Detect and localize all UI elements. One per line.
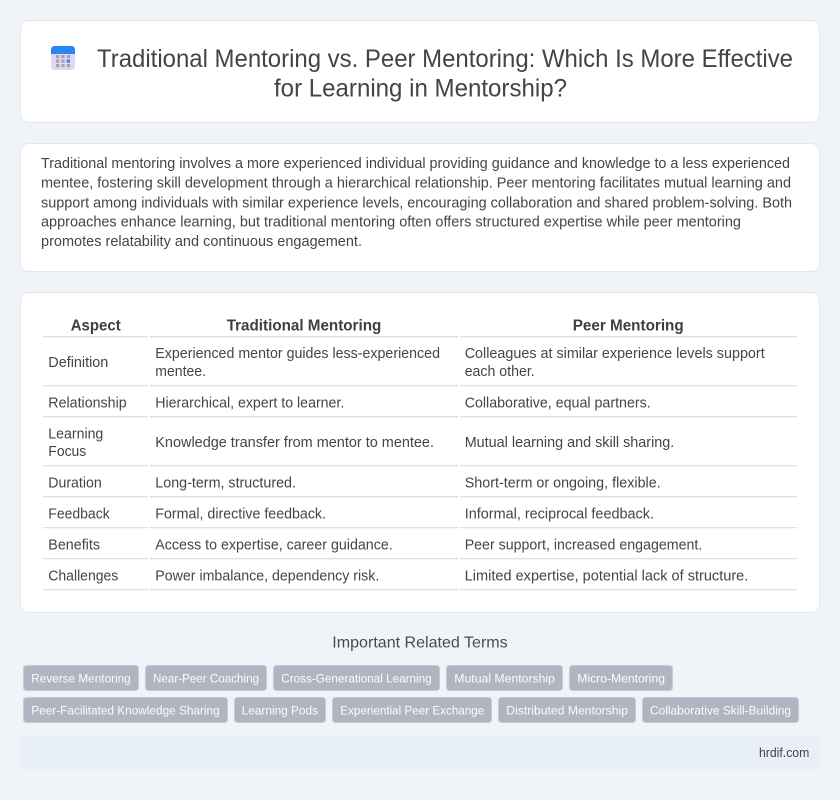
row: challenges: Challenges: [48, 568, 118, 584]
row: learning focus: Focus: [48, 444, 86, 460]
row: definition: Experienced mentor guides less-experienced: [155, 346, 440, 362]
row: duration: Duration: [48, 475, 102, 491]
row: challenges: Power imbalance, dependency risk.: [155, 568, 379, 584]
tag: Cross-Generational Learning: [281, 671, 432, 685]
text block: introduction: [41, 156, 792, 250]
text block: introduction: Traditional mentoring involves a more experienced individual providing guidance and knowledge to a less experienced: [41, 156, 790, 172]
row: benefits: Benefits: [48, 537, 100, 553]
tag: [498, 698, 636, 722]
row: definition: mentee.: [155, 364, 206, 380]
tag: Learning Pods: [242, 703, 318, 717]
footer: hrdif.com: [759, 746, 809, 760]
text block: introduction: promotes relatability and continuous engagement.: [41, 234, 362, 250]
footer: [20, 736, 820, 770]
row: relationship: Hierarchical, expert to learner.: [155, 395, 344, 411]
tag: [570, 666, 672, 690]
row: benefits: [48, 537, 702, 553]
tag: Near-Peer Coaching: [153, 671, 259, 685]
row: feedback: Feedback: [48, 506, 110, 522]
row: relationship: Relationship: [48, 395, 127, 411]
row: benefits: Access to expertise, career guidance.: [155, 537, 393, 553]
tag: [332, 698, 492, 722]
tag: [146, 666, 266, 690]
title: Traditional Mentoring vs. Peer Mentoring: Which Is More Effective: [97, 45, 793, 73]
tag: Experiential Peer Exchange: [340, 703, 484, 717]
table header: Aspect: [71, 318, 121, 334]
row: duration: Short-term or ongoing, flexible.: [465, 475, 661, 491]
panel: comparison table: [20, 292, 820, 612]
tag: Mutual Mentorship: [454, 671, 555, 685]
row: feedback: Formal, directive feedback.: [155, 506, 326, 522]
row: benefits: Peer support, increased engagement.: [465, 537, 702, 553]
tag: Collaborative Skill-Building: [650, 703, 791, 717]
icon: calendar: [51, 46, 75, 70]
table header: Traditional Mentoring: [227, 318, 381, 334]
row: definition: [48, 346, 765, 380]
row: learning focus: Mutual learning and skill sharing.: [465, 435, 674, 451]
row: duration: [48, 475, 661, 491]
row: learning focus: Knowledge transfer from mentor to mentee.: [155, 435, 434, 451]
row: feedback: Informal, reciprocal feedback.: [465, 506, 654, 522]
table header: [71, 318, 684, 334]
tag: Micro-Mentoring: [577, 671, 665, 685]
row: challenges: Limited expertise, potential lack of structure.: [465, 568, 748, 584]
tags: related terms: [24, 666, 798, 722]
panel: header: [20, 20, 820, 122]
tag: [446, 666, 562, 690]
title: [97, 45, 793, 102]
tag: Distributed Mentorship: [506, 703, 628, 717]
row: definition: each other.: [465, 364, 535, 380]
row: definition: Definition: [48, 355, 108, 371]
row: feedback: [48, 506, 654, 522]
tag: [24, 666, 138, 690]
tag: [274, 666, 440, 690]
panel: introduction: [20, 144, 820, 272]
text block: introduction: mentee, fostering skill development through a hierarchical relationship. Peer mentoring facilitates mutual learning and: [41, 176, 791, 192]
tag: [24, 698, 228, 722]
tag: [642, 698, 798, 722]
row: duration: Long-term, structured.: [155, 475, 296, 491]
tag: Peer-Facilitated Knowledge Sharing: [31, 703, 220, 717]
table header: Peer Mentoring: [573, 318, 684, 334]
heading: important related terms: Important Related Terms: [332, 634, 508, 652]
row: learning focus: Learning: [48, 426, 103, 442]
row: definition: Colleagues at similar experience levels support: [465, 346, 765, 362]
row: learning focus: [48, 426, 674, 460]
row: challenges: [48, 568, 748, 584]
row: relationship: [48, 395, 651, 411]
tag: Reverse Mentoring: [31, 671, 131, 685]
text block: introduction: approaches enhance learning, but traditional mentoring often offers structured expertise while peer mentoring: [41, 214, 741, 230]
tag: [234, 698, 326, 722]
title: for Learning in Mentorship?: [274, 74, 567, 102]
text block: introduction: support among individuals with similar experience levels, encouraging collaboration and shared problem-solving. Both: [41, 196, 792, 212]
row: relationship: Collaborative, equal partners.: [465, 395, 651, 411]
